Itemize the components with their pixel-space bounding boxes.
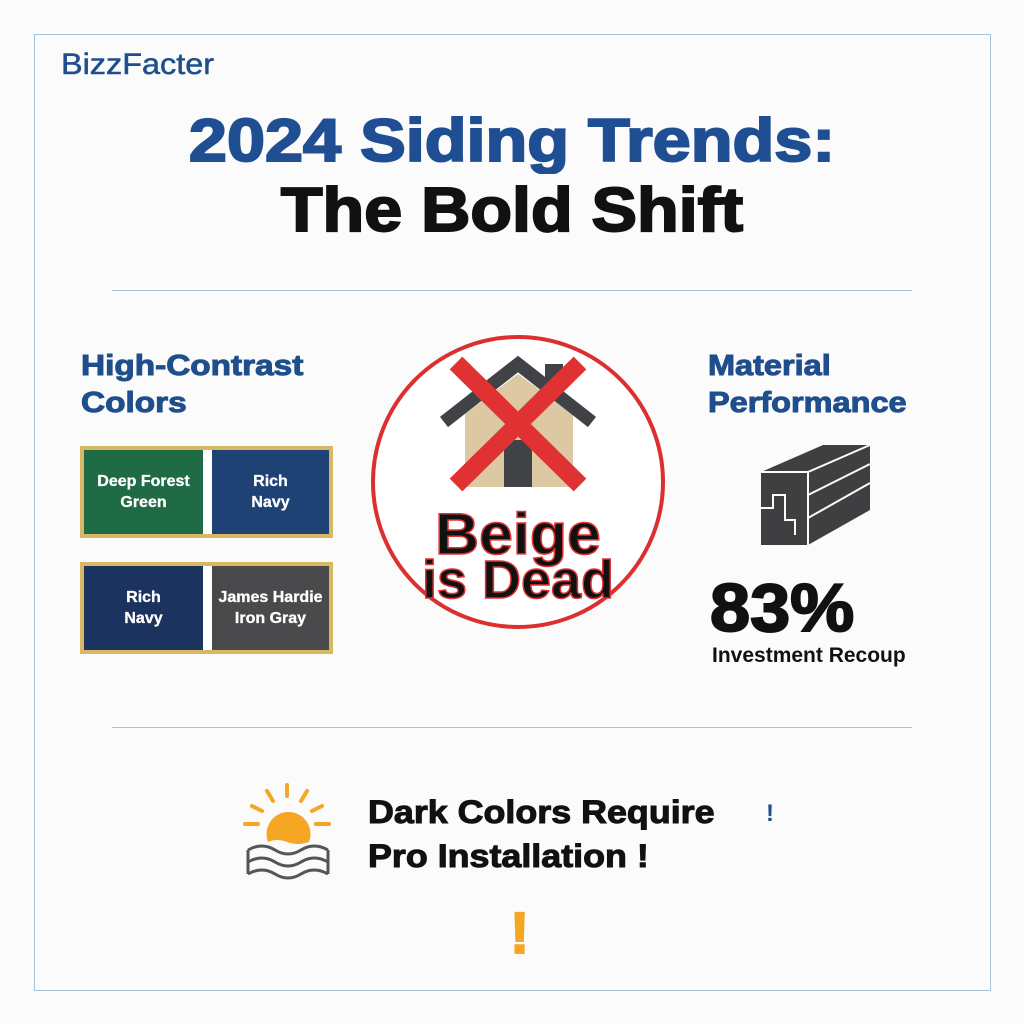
heading: high-contrast colors — [81, 350, 304, 419]
swatch pair 2: James Hardie — [218, 589, 323, 606]
heading: material performance: Material — [708, 350, 831, 382]
title — [189, 107, 835, 245]
stat label: Investment Recoup — [712, 644, 906, 667]
title: 2024 Siding Trends: — [189, 107, 835, 174]
callout blue exclamation: ! — [766, 800, 774, 827]
logo: BizzFacter — [61, 48, 214, 81]
title: The Bold Shift — [281, 176, 743, 245]
swatch pair 2: Rich — [126, 589, 161, 606]
heading: high-contrast colors: Colors — [81, 387, 187, 419]
swatch pair 1: Green — [120, 494, 167, 511]
heading: high-contrast colors: High-Contrast — [81, 350, 303, 382]
swatch pair 1: Navy — [251, 494, 290, 511]
callout text: Dark Colors Require — [368, 794, 715, 830]
icon: sun over waves — [243, 783, 331, 880]
heading: material performance: Performance — [708, 387, 907, 419]
callout text — [368, 794, 715, 874]
badge: beige is dead — [371, 335, 665, 629]
swatch pair 2: Iron Gray — [235, 610, 306, 627]
badge: beige is dead: is Dead — [422, 550, 614, 610]
swatch pair 2 — [80, 562, 333, 654]
swatch pair 1 — [80, 446, 333, 538]
heading: material performance — [708, 350, 907, 419]
stat: 83%: 83% — [710, 570, 854, 646]
callout text: Pro Installation ! — [368, 838, 649, 874]
swatch pair 2: Navy — [124, 610, 163, 627]
icon: siding board — [761, 445, 870, 545]
swatch pair 1: Rich — [253, 473, 288, 490]
icon: exclamation: ! — [510, 901, 529, 966]
swatch pair 1: Deep Forest — [97, 473, 190, 490]
badge: beige is dead: Beige — [435, 501, 601, 567]
